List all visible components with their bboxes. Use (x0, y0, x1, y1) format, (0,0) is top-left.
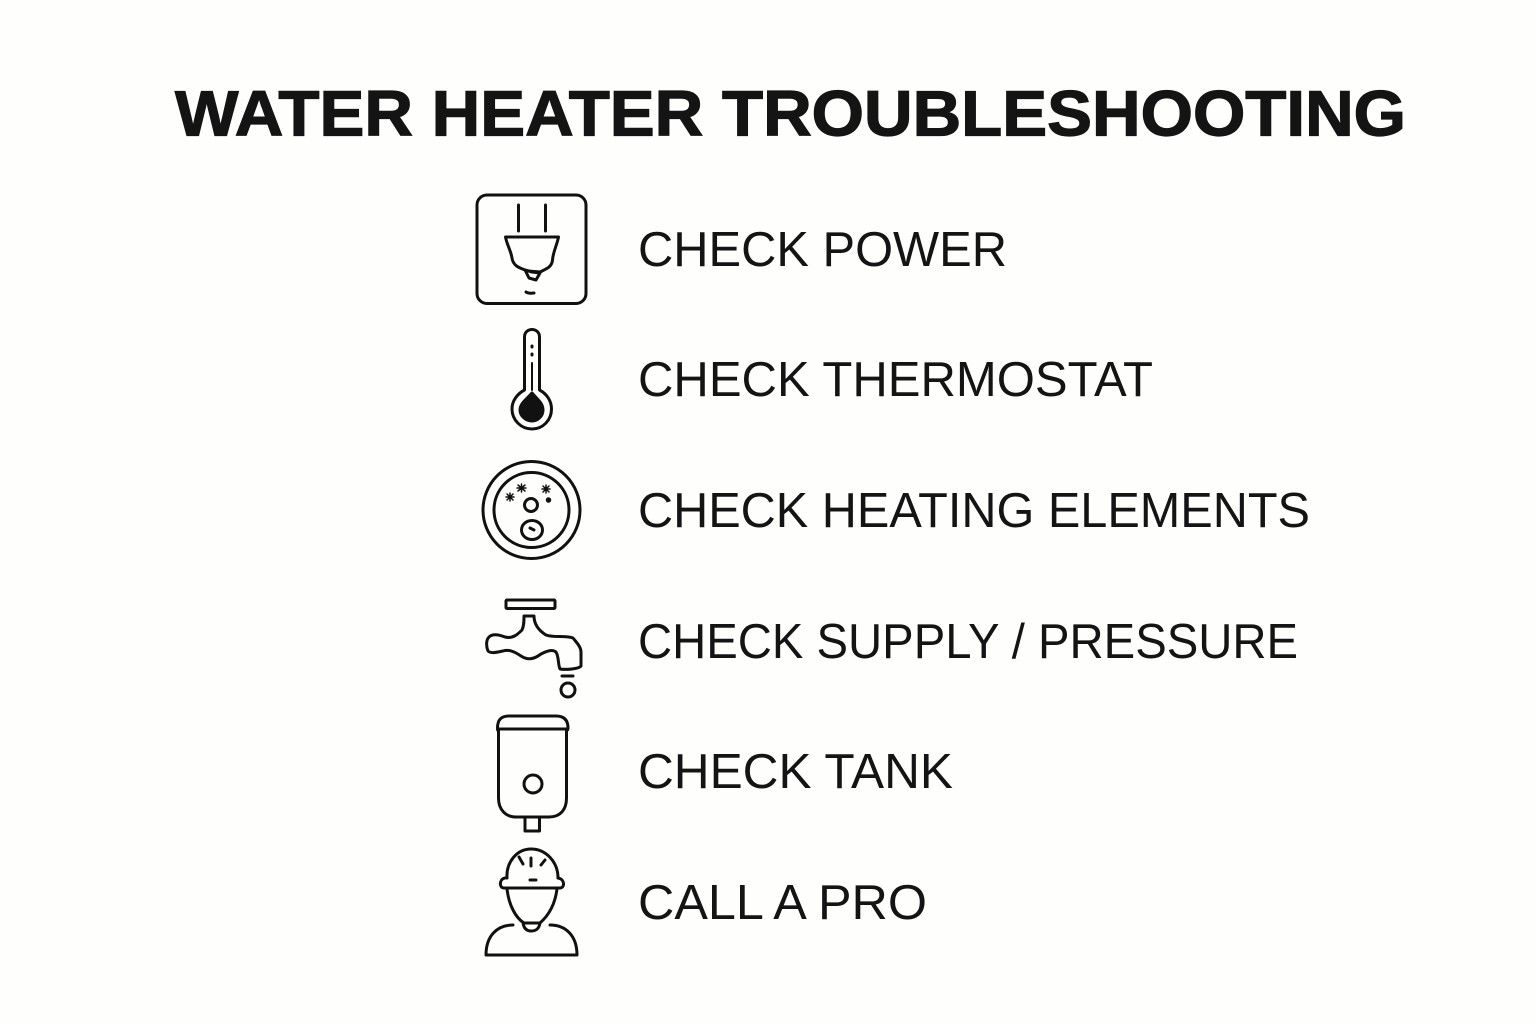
label: check heating elements: CHECK HEATING ELEMENTS (638, 484, 1310, 538)
icon: power plug (477, 195, 586, 304)
label: check power: CHECK POWER (638, 223, 1007, 277)
label: check tank: CHECK TANK (638, 745, 953, 799)
icon: heating elements (483, 462, 580, 558)
label: call a pro: CALL A PRO (638, 876, 927, 930)
icon: water tank (498, 716, 568, 831)
icon: professional in hard hat (486, 849, 577, 955)
icon: thermometer (512, 330, 552, 429)
title: WATER HEATER TROUBLESHOOTING (175, 78, 1406, 150)
label: check supply / pressure: CHECK SUPPLY / PRESSURE (638, 615, 1298, 669)
label: check thermostat: CHECK THERMOSTAT (638, 353, 1153, 407)
icon: faucet (487, 600, 581, 697)
